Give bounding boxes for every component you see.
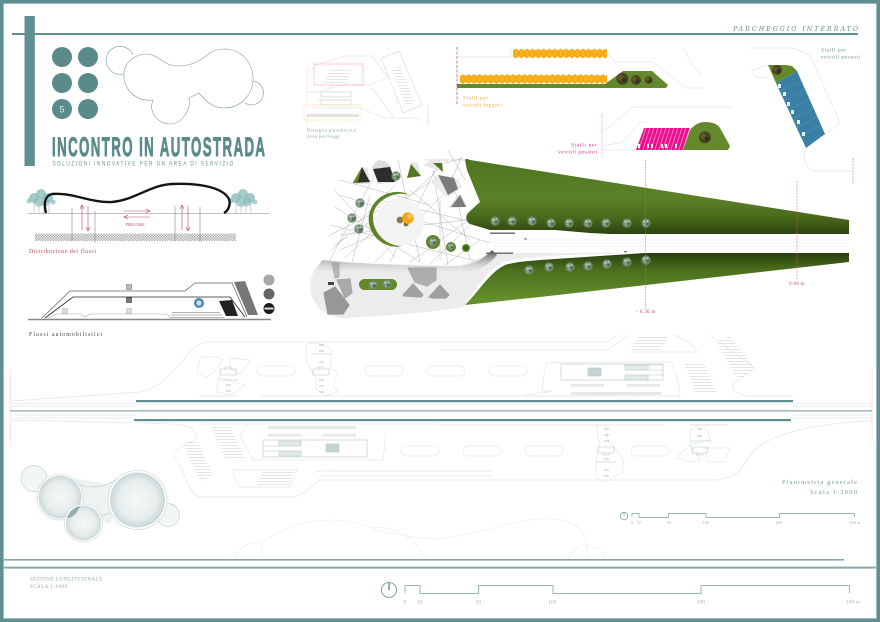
plan outlines [11,335,872,497]
central carriageway lines [136,400,793,402]
section scale bar [382,582,860,606]
section: flussi automobilistici [28,274,274,338]
subtitle: SOLUZIONI INNOVATIVE PER UN AREA DI SERVIZIO [52,161,234,168]
plan scale bar: 0 [631,521,633,525]
detail: heavy vehicle stalls magenta: veicoli pesanti [558,150,597,156]
section: distribuzione dei flussi: PERCORSI [125,222,145,227]
detail: light vehicle stalls: veicoli leggeri [463,102,502,108]
section scale bar: 100 [548,600,557,606]
central plan [310,150,853,318]
general plan [10,335,872,497]
site outline blob [106,46,263,124]
header rule [12,33,858,35]
plaza disc [376,198,424,246]
section: distribuzione dei flussi: Distribuzione dei flussi [29,248,96,255]
section: flussi automobilistici: Flussi automobilistici [29,332,102,338]
detail: underground blue stalls [750,48,860,171]
icon: no entry [264,303,274,314]
detail plan: parking area [304,51,428,138]
plan label: Planimetria generale [782,479,857,486]
heading: parcheggio interrato: PARCHEGGIO INTERRATO [732,26,859,33]
slab pavilions [324,263,449,314]
title: INCONTRO IN AUTOSTRADA [52,133,265,162]
section scale bar: 300 m [846,600,860,606]
section label: SEZIONE LONGITUDINALE [30,578,102,582]
icon: light vehicles [264,274,274,286]
panel number dots: 5 [59,104,65,114]
small pavilions top [353,158,468,208]
section: distribuzione dei flussi [26,184,269,255]
detail: underground blue stalls: veicoli pesanti [821,54,860,60]
plan scale bar: 200 [776,521,782,525]
vertical title bar [24,16,35,166]
plan scale bar: 50 [667,521,671,525]
green crescent [369,192,410,247]
section scale bar: 50 [476,600,481,606]
plan scale bar: 100 [703,521,709,525]
section scale bar: 200 [697,600,705,606]
lower green wedge [465,253,849,305]
detail plan: parking area: Area parcheggi [307,134,341,138]
upper green wedge [465,159,849,234]
icon: north arrow small [620,512,628,520]
faint section outlines [235,519,606,560]
plan scale bar [620,512,861,525]
roof bubbles plan [21,466,180,542]
lower grey slab [310,253,640,318]
plaza trees [347,198,470,252]
level markers: 0.00 m [789,282,805,287]
level markers: - 6.30 m [636,310,656,315]
bottom rules [4,559,876,569]
detail plan: parking area: Dettaglio planimetrico [307,128,357,132]
parking stripes [183,336,755,487]
icon: north arrow [382,582,396,598]
network of paths [320,150,490,265]
green pill with trees [359,279,397,290]
flow arrows [80,205,190,231]
icon: right tree [228,189,258,213]
icon: bus stop [194,298,204,308]
detail: light vehicle stalls: Stalli per [463,96,488,102]
plan label: Scala 1:2000 [810,489,858,496]
yellow pavilion [397,212,414,226]
detail: heavy vehicle stalls magenta: Stalli per [571,142,597,148]
panel number dots [52,47,98,119]
tree rows [490,216,651,275]
slab shadow [316,250,497,275]
plan scale bar: 300 m [849,521,861,525]
road [486,232,849,254]
detail: heavy vehicle stalls magenta [558,107,733,157]
section scale bar: 10 [417,600,423,606]
plan scale bar: 10 [637,521,641,525]
section label: SCALA 1:1000 [30,585,68,590]
plan label [782,479,858,496]
icon: heavy vehicles [264,288,274,300]
detail: underground blue stalls: Stalli per [821,48,846,54]
section label [30,578,102,590]
service buildings [218,345,728,476]
detail: light vehicle stalls [457,47,703,108]
level markers [636,158,853,315]
icon: left tree [26,189,56,213]
section scale bar: 0 [404,600,407,606]
